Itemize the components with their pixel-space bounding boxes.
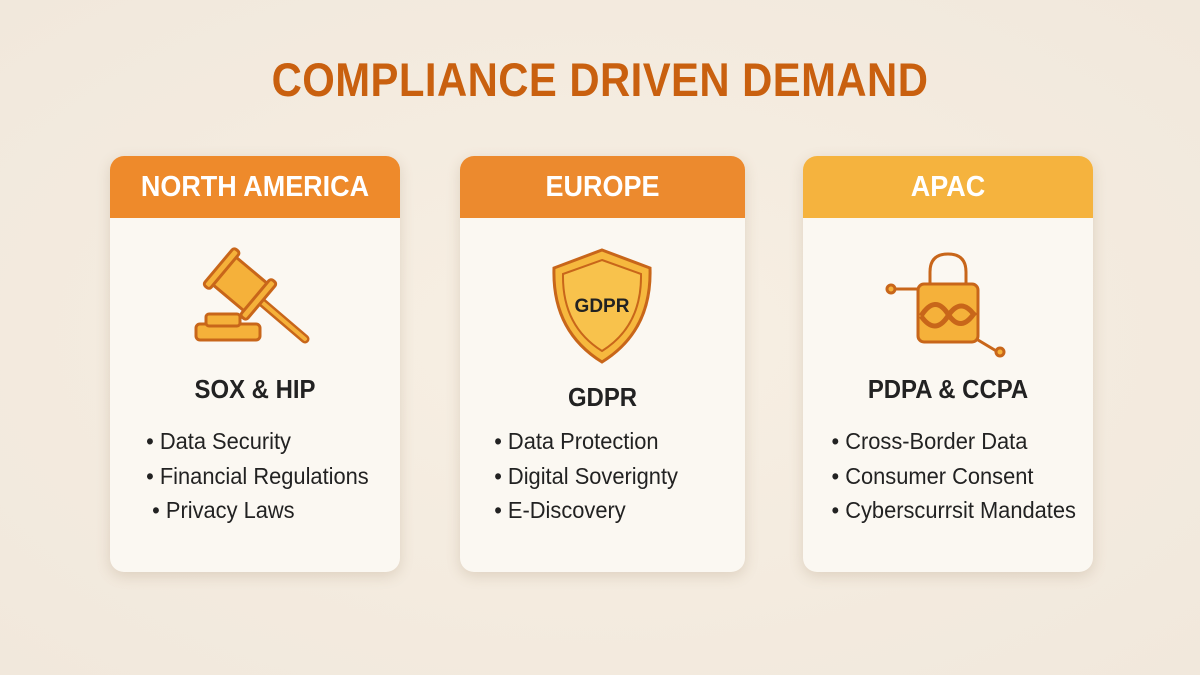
header: apac: APAC <box>911 171 985 203</box>
header: apac <box>803 156 1093 218</box>
header: europe: EUROPE <box>546 171 659 203</box>
panel: europe <box>460 156 745 572</box>
bullet list: • Cyberscurrsit Mandates <box>832 497 1076 523</box>
icon: lock <box>886 252 1006 358</box>
bullet list: • Consumer Consent <box>832 462 1033 488</box>
title: COMPLIANCE DRIVEN DEMAND <box>272 53 928 106</box>
icon: gdpr shield <box>552 248 652 364</box>
bullet list <box>494 428 678 523</box>
subtitle: SOX & HIP <box>195 374 315 404</box>
icon: gdpr shield: GDPR <box>575 296 630 317</box>
bullet list: • E-Discovery <box>494 497 626 523</box>
header: north america: NORTH AMERICA <box>141 171 369 203</box>
bullet list <box>146 428 369 523</box>
header: europe <box>460 156 745 218</box>
bullet list: • Data Security <box>146 428 291 454</box>
subtitle: GDPR <box>568 382 637 412</box>
bullet list: • Data Protection <box>494 428 659 454</box>
header: north america <box>110 156 400 218</box>
panel: north america <box>110 156 400 572</box>
bullet list: • Financial Regulations <box>146 462 369 488</box>
panel: apac <box>803 156 1093 572</box>
bullet list: • Cross-Border Data <box>832 428 1027 454</box>
bullet list: • Privacy Laws <box>152 497 295 523</box>
icon: gavel <box>194 247 310 344</box>
bullet list: • Digital Soverignty <box>494 462 678 488</box>
subtitle: PDPA & CCPA <box>868 374 1028 404</box>
bullet list <box>832 428 1076 523</box>
